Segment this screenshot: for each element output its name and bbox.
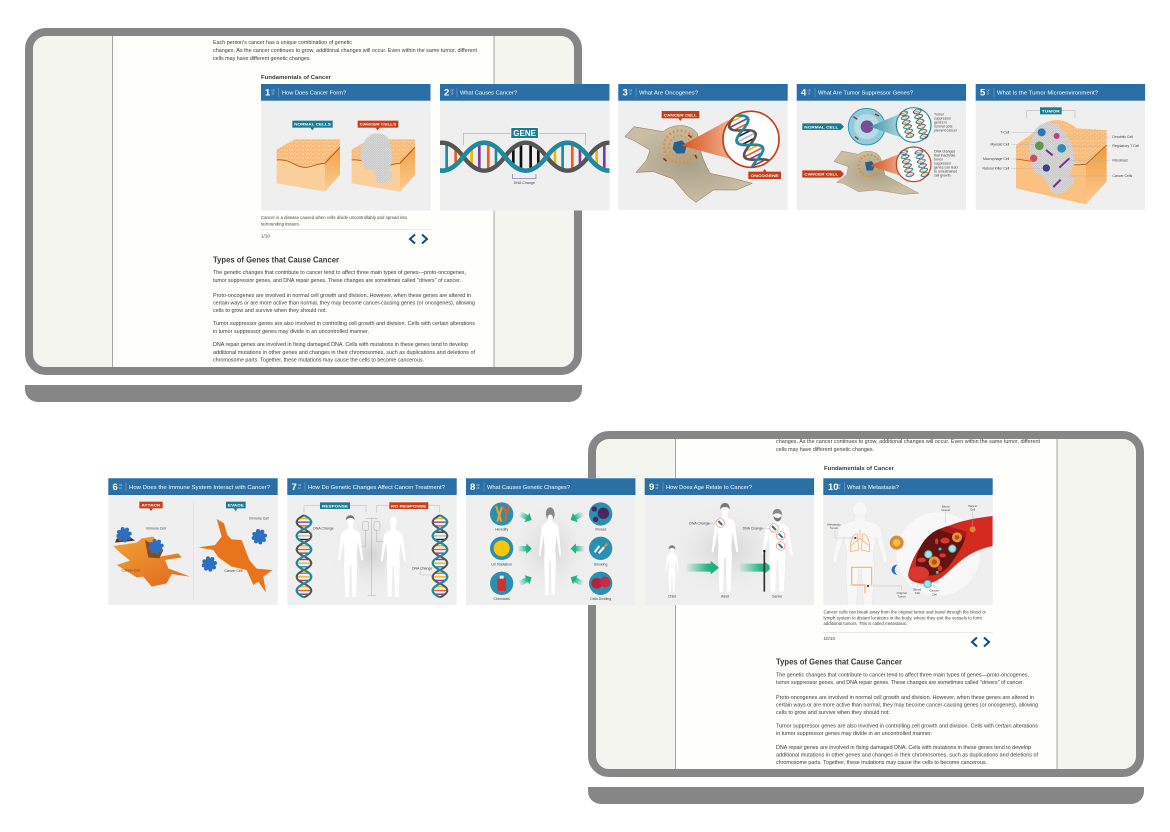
article paragraphs: chromosome parts. Together, these mutations may cause the cells to become cancerous. bbox=[213, 358, 424, 364]
slide header: What Is the Tumor Microenvironment? bbox=[997, 90, 1098, 96]
slide header: How Do Genetic Changes Affect Cancer Treatment? bbox=[308, 485, 445, 491]
green arrows bbox=[687, 561, 772, 574]
blood cells bbox=[908, 538, 950, 580]
intro text: cells may have different genetic changes. bbox=[776, 447, 874, 453]
panel: slide 3 what are oncogenes bbox=[618, 84, 789, 210]
normal skin block bbox=[277, 139, 340, 192]
cancer nucleus bbox=[859, 155, 880, 176]
laptop: lower right bbox=[588, 435, 1144, 804]
evade labels bbox=[224, 516, 269, 573]
illustration: normal and cancer cells bbox=[802, 108, 958, 194]
article paragraphs: in tumor suppressor genes may divide in an uncontrolled manner. bbox=[213, 329, 369, 335]
caption slide 10: lymph system to distant locations in the body, where they exit the vessels to form bbox=[824, 615, 982, 620]
slide header: OF bbox=[450, 90, 454, 92]
tissue block bbox=[1016, 120, 1107, 204]
icon: uv radiation bbox=[490, 537, 513, 560]
article paragraphs bbox=[213, 270, 476, 364]
slide header: 9 bbox=[649, 482, 654, 493]
site labels: Blood bbox=[942, 504, 950, 508]
note: changed genes: genes can lead bbox=[934, 166, 958, 170]
label: evade bbox=[226, 502, 246, 511]
site labels: Cancer bbox=[968, 504, 977, 508]
note: normal genes: normal cells bbox=[934, 125, 953, 129]
magnifier cones bbox=[870, 112, 903, 177]
label: cancer cell: CANCER CELL bbox=[664, 113, 698, 117]
senior bbox=[762, 509, 793, 592]
right cell labels: Cancer Cells bbox=[1112, 174, 1133, 178]
slide header: How Does Cancer Form? bbox=[282, 90, 346, 96]
slide header: 10 bbox=[828, 482, 839, 493]
site labels: Metastatic bbox=[827, 522, 841, 526]
DNA strands bbox=[422, 143, 630, 171]
site labels: Tumor bbox=[830, 526, 838, 530]
article paragraphs: Proto-oncogenes are involved in normal cell growth and division. However, when these genes are altered in bbox=[213, 293, 471, 299]
article paragraphs: additional mutations in other genes and changes in their chromosomes, such as duplications and deletions of bbox=[776, 752, 1039, 758]
cancer cell body bbox=[834, 151, 919, 194]
icon: viruses bbox=[589, 502, 612, 526]
label: response bbox=[320, 502, 350, 509]
slide header: How Does Age Relate to Cancer? bbox=[666, 485, 752, 491]
slide header: OF bbox=[119, 484, 123, 487]
slide header bbox=[823, 478, 993, 495]
article paragraphs: tumor suppressor genes, and DNA repair genes. These changes are sometimes called "drivers" of cancer. bbox=[213, 278, 461, 284]
blood vessel bbox=[908, 516, 993, 584]
label: attack: ATTACK bbox=[141, 504, 161, 508]
age labels: Child bbox=[668, 595, 676, 599]
tumor bracket bbox=[1027, 111, 1075, 118]
slideshow heading: Fundamentals of Cancer bbox=[261, 75, 332, 81]
article paragraphs: Proto-oncogenes are involved in normal cell growth and division. However, when these genes are altered in bbox=[776, 695, 1034, 701]
slide header: 6 bbox=[112, 482, 118, 493]
cancer cell body bbox=[625, 126, 752, 202]
IV stand bbox=[362, 518, 383, 595]
note: changed genes: cell growth. bbox=[934, 174, 952, 178]
age labels: Senior bbox=[772, 595, 783, 599]
caption slide 10: additional tumors. This is called metastasis. bbox=[824, 621, 907, 626]
panel: slide 7 treatment bbox=[287, 478, 457, 605]
cause labels: Chemicals bbox=[494, 597, 510, 601]
intro text: cells may have different genetic changes. bbox=[213, 56, 311, 62]
note: changed genes: tumor bbox=[934, 158, 944, 162]
site labels: Cancer bbox=[930, 589, 939, 593]
panel: slide 9 age bbox=[645, 478, 814, 605]
caption slide 1: surrounding tissues. bbox=[261, 222, 300, 226]
laptop: upper left bbox=[25, 32, 582, 402]
slide header: 7 bbox=[292, 482, 297, 493]
tumor mass bbox=[1030, 122, 1075, 194]
slide counter: 1/10 bbox=[261, 234, 270, 238]
site labels: Vessel bbox=[941, 508, 950, 512]
left cell labels bbox=[982, 130, 1010, 171]
illustration: response and no response bbox=[297, 502, 447, 598]
slide header: 10 bbox=[298, 487, 301, 490]
label: response: RESPONSE bbox=[322, 504, 349, 508]
note: changed genes: that inactivate bbox=[934, 154, 956, 158]
leader lines bbox=[1012, 132, 1110, 176]
slide header: What Are Tumor Suppressor Genes? bbox=[818, 90, 913, 96]
slide header bbox=[466, 478, 635, 495]
body outline bbox=[832, 502, 888, 612]
DNA change notes: DNA Change bbox=[689, 521, 710, 525]
section heading: Types of Genes that Cause Cancer bbox=[776, 658, 902, 666]
note: changed genes: suppressor bbox=[934, 162, 952, 166]
DNA change note right bbox=[412, 567, 433, 575]
cause labels: Cells Dividing bbox=[590, 597, 611, 601]
slide header: 10 bbox=[476, 487, 480, 490]
cause labels: Smoking bbox=[594, 562, 607, 566]
panel: slide 4 tumor suppressor genes bbox=[797, 84, 966, 210]
icon: previous and next arrows bbox=[410, 234, 427, 244]
icon: previous and next arrows bbox=[972, 638, 989, 646]
intro text bbox=[213, 40, 477, 62]
DNA magnifier bbox=[722, 110, 780, 168]
note: changed genes bbox=[934, 150, 958, 178]
slide header: What Causes Cancer? bbox=[460, 90, 517, 96]
illustration: skin blocks bbox=[277, 121, 415, 192]
slide header bbox=[618, 84, 788, 101]
label: no response bbox=[389, 502, 428, 509]
slide header: OF bbox=[476, 484, 480, 487]
slide header: 2 bbox=[444, 88, 449, 98]
right cell labels: Regulatory T Cell bbox=[1112, 144, 1139, 148]
note: normal genes: prevent cancer bbox=[934, 129, 958, 133]
central body bbox=[539, 507, 561, 595]
leader lines bbox=[835, 512, 973, 591]
intro text: changes. As the cancer continues to grow, additional changes will occur. Even within the same tumor, different bbox=[213, 48, 477, 54]
label: oncogene bbox=[748, 169, 781, 179]
slide header: OF bbox=[656, 484, 659, 487]
DNA change note right: DNA Change bbox=[412, 567, 432, 571]
label: normal cell bbox=[802, 123, 844, 130]
page column bbox=[112, 36, 494, 367]
note: normal genes: genes in bbox=[934, 121, 947, 125]
article paragraphs: cells to grow and survive when they should not. bbox=[213, 308, 327, 314]
age labels bbox=[668, 595, 783, 599]
slide header: 10 bbox=[119, 487, 122, 490]
attack labels bbox=[122, 526, 166, 573]
DNA change bracket: DNA Change bbox=[514, 181, 535, 185]
DNA change rings bbox=[716, 519, 785, 550]
slide header: 1 bbox=[265, 88, 271, 98]
label: attack bbox=[139, 502, 163, 511]
panel: slide 8 genetic changes bbox=[466, 478, 635, 605]
article paragraphs: tumor suppressor genes, and DNA repair genes. These changes are sometimes called "drivers" of cancer. bbox=[776, 680, 1024, 686]
label: gene: GENE bbox=[513, 128, 536, 138]
DNA rungs bbox=[445, 145, 606, 168]
patient left bbox=[338, 515, 363, 597]
DNA change notes bbox=[689, 521, 770, 530]
left cell labels: T-Cell bbox=[1000, 130, 1010, 134]
left cell labels: Myeloid Cell bbox=[990, 142, 1010, 146]
evading immune cells bbox=[202, 529, 267, 572]
illustration: causes around body bbox=[490, 502, 612, 601]
right cell labels: Fibroblast bbox=[1112, 158, 1128, 162]
right cell labels: Dendritic Cell bbox=[1112, 135, 1133, 139]
DNA circle: changed bbox=[896, 147, 931, 182]
slide header: OF bbox=[986, 90, 990, 92]
DNA right bbox=[433, 515, 447, 597]
attack labels: Immune Cell bbox=[146, 526, 166, 530]
icon: cells dividing bbox=[589, 572, 612, 595]
illustration: DNA helix with gene bbox=[440, 128, 610, 185]
age labels: Adult bbox=[721, 595, 729, 599]
tumour markers bbox=[854, 537, 869, 587]
label: cancer cell: CANCER CELL bbox=[804, 173, 839, 177]
slide header: OF bbox=[808, 90, 811, 92]
DNA circle: normal bbox=[896, 108, 931, 142]
section heading: Types of Genes that Cause Cancer bbox=[213, 256, 339, 264]
normal cell bbox=[848, 108, 885, 145]
slide header bbox=[645, 478, 814, 495]
site labels bbox=[827, 504, 977, 599]
slide header: 10 bbox=[986, 92, 990, 96]
slide header: OF bbox=[298, 484, 302, 487]
slideshow heading: Fundamentals of Cancer bbox=[824, 466, 895, 472]
slide header: 10 bbox=[808, 92, 811, 96]
floating cells bbox=[890, 536, 904, 575]
slide header bbox=[797, 84, 966, 101]
DNA change note left: DNA Change bbox=[313, 527, 334, 531]
cause labels: UV Radiation bbox=[491, 562, 512, 566]
slide header: OF bbox=[838, 484, 841, 487]
slide header: 5 bbox=[980, 88, 986, 98]
note: normal genes bbox=[934, 113, 958, 133]
slide header: OF bbox=[272, 90, 275, 92]
intro text bbox=[776, 439, 1040, 453]
slide header bbox=[287, 478, 457, 495]
icon: heredity bbox=[490, 502, 513, 526]
intestines bbox=[852, 567, 872, 593]
icon: chemicals bbox=[490, 572, 513, 595]
cause labels: Heredity bbox=[495, 527, 508, 531]
panel: slide 5 tumor microenvironment bbox=[976, 84, 1145, 210]
cancerous skin block bbox=[352, 133, 415, 192]
slide header bbox=[976, 84, 1145, 101]
laptop screen frame bbox=[29, 32, 578, 371]
slide header: 3 bbox=[622, 88, 628, 98]
DNA change bracket bbox=[513, 174, 536, 185]
article paragraphs: The genetic changes that contribute to cancer tend to affect three main types of genes—proto-oncogenes, bbox=[213, 270, 466, 276]
note: changed genes: DNA changes bbox=[934, 150, 956, 154]
evading cancer cell bbox=[198, 519, 273, 593]
label: tumor: TUMOR bbox=[1042, 109, 1060, 113]
DNA left bbox=[297, 515, 311, 597]
slide header: 10 bbox=[450, 92, 454, 96]
intro text: changes. As the cancer continues to grow, additional changes will occur. Even within the same tumor, different bbox=[776, 439, 1040, 445]
label: evade: EVADE bbox=[228, 504, 245, 508]
attacked cancer cell bbox=[113, 537, 190, 587]
site labels: Tumor bbox=[897, 595, 906, 599]
caption slide 10 bbox=[824, 610, 986, 626]
attack labels: Cancer Cell bbox=[122, 569, 140, 573]
illustration: tumor microenvironment bbox=[982, 107, 1139, 204]
icon: smoking bbox=[589, 537, 612, 560]
laptop base bbox=[25, 385, 582, 402]
gene bracket bbox=[463, 133, 586, 145]
slide header: 10 bbox=[629, 92, 632, 96]
illustration: cancer cell with oncogene bbox=[625, 111, 789, 208]
magnified area bbox=[897, 512, 980, 596]
site labels: Cell bbox=[915, 591, 920, 595]
article paragraphs: DNA repair genes are involved in fixing damaged DNA. Cells with mutations in these genes tend to develop bbox=[776, 745, 1031, 751]
organelles bbox=[663, 131, 697, 163]
evade labels: Immune Cell bbox=[249, 516, 269, 520]
illustration: aging figures bbox=[663, 502, 793, 599]
illustration: attack and evade bbox=[113, 502, 273, 600]
article paragraphs: chromosome parts. Together, these mutations may cause the cells to become cancerous. bbox=[776, 760, 987, 766]
adult bbox=[712, 502, 738, 592]
slide header: 8 bbox=[470, 482, 475, 493]
slide header: What Causes Genetic Changes? bbox=[487, 485, 570, 491]
label: cancer cell bbox=[662, 111, 699, 121]
cancer cells bbox=[924, 526, 976, 588]
DNA change note left bbox=[312, 527, 334, 536]
slide header: 10 bbox=[838, 487, 841, 490]
slide header: What Are Oncogenes? bbox=[639, 90, 698, 96]
immune cells bbox=[1030, 128, 1069, 187]
label: normal cells: NORMAL CELLS bbox=[294, 123, 332, 127]
left cell labels: Macrophage Cell bbox=[983, 157, 1010, 161]
label: oncogene: ONCOGENE bbox=[751, 174, 779, 178]
left cell labels: Natural Killer Cell bbox=[982, 167, 1010, 171]
green arrows bbox=[517, 509, 585, 588]
caption slide 1: Cancer is a disease caused when cells divide uncontrollably and spread into bbox=[261, 215, 407, 220]
panel: slide 6 immune system bbox=[108, 478, 278, 605]
patient right bbox=[381, 517, 406, 597]
article paragraphs: Tumor suppressor genes are also involved in controlling cell growth and division. Cells with certain alterations bbox=[776, 724, 1038, 730]
site labels: Blood bbox=[914, 587, 921, 591]
note: changed genes: to unrestrained bbox=[934, 170, 957, 174]
label: no response: NO RESPONSE bbox=[391, 504, 427, 508]
slide header: How Does the Immune System Interact with Cancer? bbox=[129, 485, 270, 491]
slide header: OF bbox=[629, 90, 633, 92]
article paragraphs: certain ways or are more active than normal, they may become cancer-causing genes (or oncogenes), allowing bbox=[776, 702, 1038, 708]
note: normal genes: suppressor bbox=[934, 117, 952, 121]
magnifier cone bbox=[682, 120, 731, 159]
caption slide 1 bbox=[261, 215, 407, 226]
article paragraphs: DNA repair genes are involved in fixing damaged DNA. Cells with mutations in these genes tend to develop bbox=[213, 342, 468, 348]
site labels: Cell bbox=[970, 508, 976, 512]
slide header: 10 bbox=[656, 487, 659, 490]
slide header: What Is Metastasis? bbox=[847, 485, 899, 491]
cause labels: Viruses bbox=[595, 527, 607, 531]
brackets bbox=[304, 505, 439, 513]
panel: slide 10 metastasis bbox=[823, 478, 993, 612]
article paragraphs: Tumor suppressor genes are also involved in controlling cell growth and division. Cells with certain alterations bbox=[213, 321, 475, 327]
DNA change notes: DNA Change bbox=[743, 526, 763, 530]
article paragraphs: additional mutations in other genes and changes in their chromosomes, such as duplications and deletions of bbox=[213, 350, 476, 356]
page column bbox=[676, 439, 1057, 769]
slide header: 10 bbox=[272, 92, 275, 96]
intro text: Each person's cancer has a unique combination of genetic bbox=[213, 40, 352, 46]
slide header bbox=[108, 478, 278, 495]
site labels: Original bbox=[897, 591, 907, 595]
laptop screen frame bbox=[592, 435, 1140, 773]
label: cancer cells: CANCER CELLS bbox=[360, 123, 397, 127]
slide header bbox=[261, 84, 430, 101]
caption slide 10: Cancer cells can break away from the original tumor and travel through the blood or bbox=[824, 610, 986, 614]
label: cancer cell bbox=[802, 170, 844, 178]
article paragraphs: cells to grow and survive when they should not. bbox=[776, 710, 890, 716]
laptop base bbox=[588, 787, 1144, 804]
article paragraphs: in tumor suppressor genes may divide in an uncontrolled manner. bbox=[776, 731, 932, 737]
evade labels: Cancer Cell bbox=[224, 569, 243, 573]
panel: slide 1 how does cancer form bbox=[261, 84, 430, 210]
panel: slide 2 what causes cancer bbox=[440, 84, 610, 210]
label: tumor bbox=[1040, 107, 1062, 114]
slide counter: 10/10 bbox=[824, 636, 835, 641]
article paragraphs: The genetic changes that contribute to cancer tend to affect three main types of genes—proto-oncogenes, bbox=[776, 672, 1029, 678]
illustration: metastasis bbox=[827, 502, 993, 612]
site labels: Cell bbox=[932, 592, 937, 596]
slide header bbox=[440, 84, 610, 101]
article paragraphs: certain ways or are more active than normal, they may become cancer-causing genes (or oncogenes), allowing bbox=[213, 300, 475, 306]
label: normal cell: NORMAL CELL bbox=[804, 125, 839, 129]
slide header: 4 bbox=[801, 88, 807, 98]
child bbox=[665, 545, 679, 592]
right cell labels bbox=[1112, 135, 1139, 178]
article paragraphs bbox=[776, 672, 1039, 766]
note: normal genes: Tumor bbox=[934, 113, 945, 117]
cause labels bbox=[491, 527, 611, 601]
lungs bbox=[850, 529, 870, 552]
immune cells attacking bbox=[116, 527, 164, 554]
